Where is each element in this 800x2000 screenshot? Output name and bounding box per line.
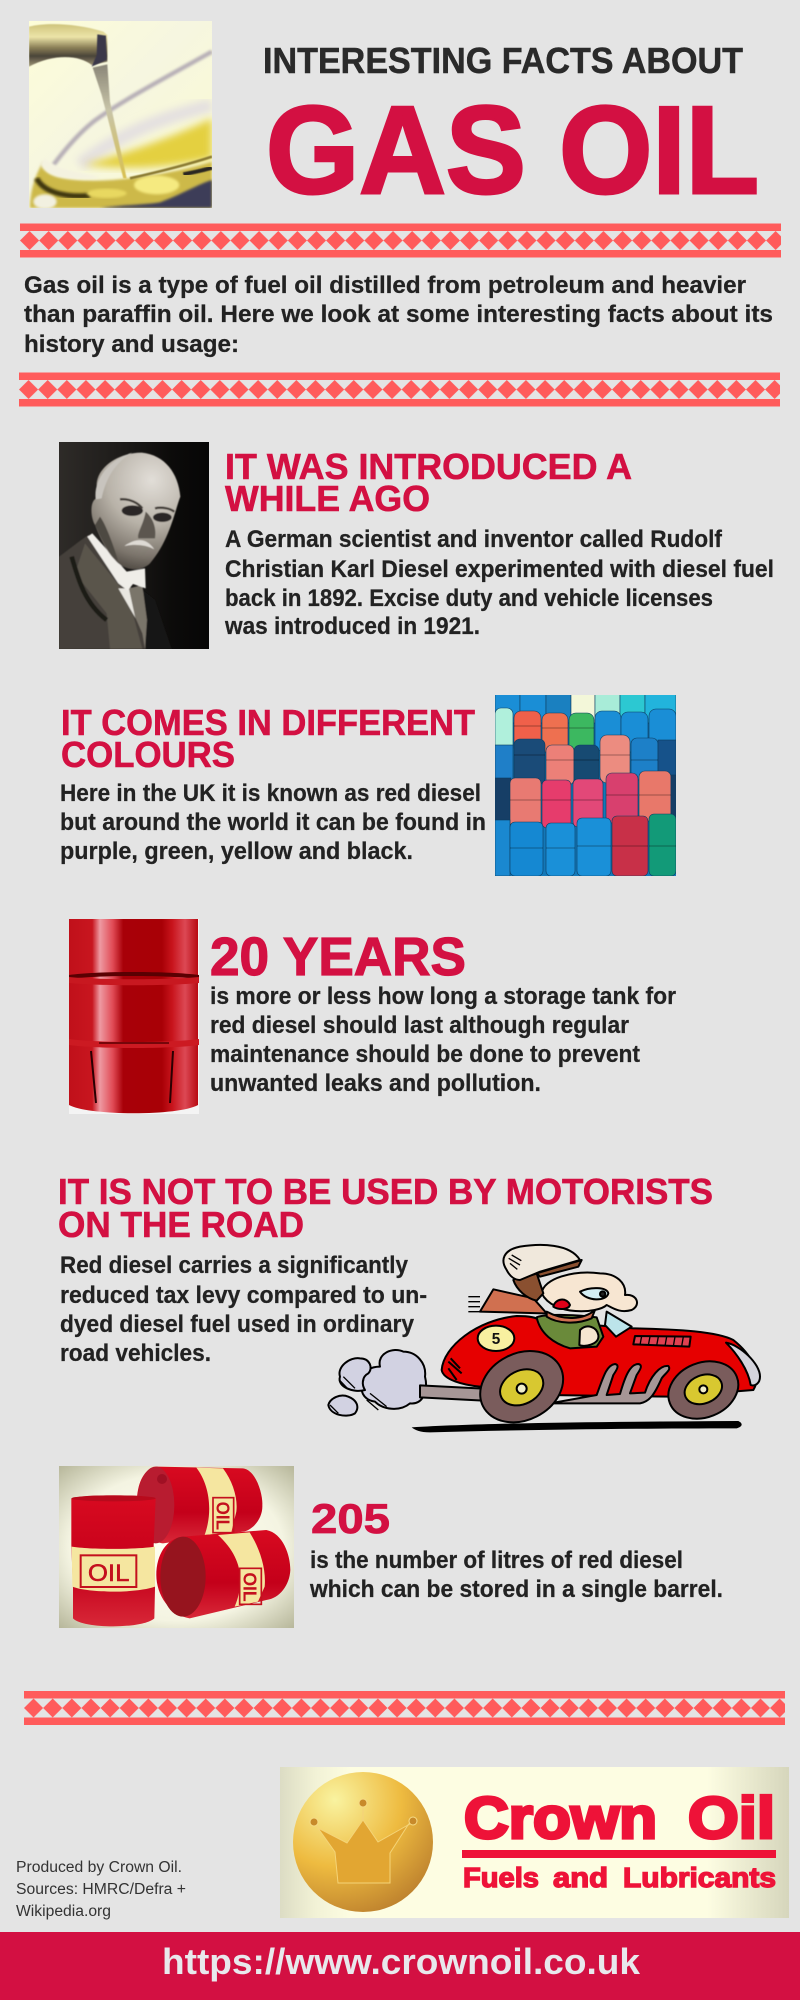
body text: tax levy: road vehicles. (60, 1340, 211, 1367)
heading: it was introduced: IT WAS INTRODUCED A (225, 446, 632, 487)
divider band 1 (20, 224, 781, 258)
photo: oil being poured (29, 21, 212, 208)
illustration: cartoon racing car: 5 (492, 1331, 501, 1348)
brand tagline: Fuels (463, 1862, 539, 1893)
footer bar with URL: https://www.crownoil.co.uk (162, 1941, 641, 1982)
credits text: Wikipedia.org (16, 1903, 111, 1920)
heading: not to be used by motorists (58, 1171, 713, 1245)
body text: Rudolf Diesel: back in 1892. Excise duty and vehicle licenses (225, 585, 713, 612)
body text: litres per barrel (309, 1547, 723, 1603)
heading: 20 years: 20 YEARS (210, 927, 466, 987)
intro text (24, 272, 773, 358)
brand name: Oil (688, 1786, 775, 1851)
brand name: Crown (464, 1786, 657, 1851)
body text: tax levy: Red diesel carries a significantly (60, 1252, 409, 1279)
left barrel (71, 1495, 156, 1626)
left barrel: OIL (88, 1560, 129, 1587)
title: interesting facts about: INTERESTING FACTS ABOUT (263, 40, 743, 81)
body text: Rudolf Diesel: Christian Karl Diesel experimented with diesel fuel (225, 556, 774, 583)
upper barrel (137, 1467, 262, 1543)
divider band 3 (24, 1691, 785, 1725)
body text: Rudolf Diesel: A German scientist and inventor called Rudolf (225, 526, 723, 553)
body text: tax levy: dyed diesel fuel used in ordinary (60, 1311, 415, 1338)
panel: different colours (60, 693, 676, 876)
heading: it was introduced: WHILE AGO (225, 478, 430, 519)
body text: red diesel colours: purple, green, yellow and black. (60, 838, 413, 865)
credits text (16, 1859, 186, 1920)
footer bar with URL (0, 1932, 800, 2000)
icon: gold crown coin (293, 1772, 433, 1912)
heading: it comes in different colours (61, 702, 475, 775)
lower barrel: OIL (240, 1572, 261, 1602)
body text: litres per barrel: is the number of litres of red diesel (310, 1547, 683, 1574)
lower barrel (156, 1530, 290, 1618)
body text: storage tank lifespan: red diesel should last although regular (210, 1012, 629, 1039)
body text: storage tank lifespan (210, 983, 676, 1097)
brand tagline: Lubricants (623, 1862, 776, 1893)
panel: not for motorists (58, 1171, 760, 1436)
divider band 2 (19, 372, 780, 406)
body text: red diesel colours: but around the world it can be found in (60, 809, 486, 836)
icon: red storage drum (69, 919, 199, 1114)
credits text: Produced by Crown Oil. (16, 1859, 182, 1876)
body text: tax levy (60, 1252, 427, 1367)
body text: Rudolf Diesel (224, 526, 774, 640)
brand name (464, 1786, 775, 1851)
brand rule (462, 1850, 776, 1858)
body text: Rudolf Diesel: was introduced in 1921. (224, 613, 480, 640)
body text: red diesel colours: Here in the UK it is known as red diesel (60, 780, 481, 807)
credits text: Sources: HMRC/Defra + (16, 1881, 186, 1898)
panel: 205 litres (59, 1466, 723, 1628)
heading: it comes in different colours: COLOURS (61, 734, 235, 775)
intro text: Gas oil is a type of fuel oil distilled from petroleum and heavier (24, 272, 746, 299)
intro text: history and usage: (24, 331, 239, 358)
intro text: than paraffin oil. Here we look at some interesting facts about its (24, 301, 773, 328)
body text: tax levy: reduced tax levy compared to un- (60, 1282, 427, 1309)
heading: it comes in different colours: IT COMES IN DIFFERENT (61, 702, 475, 743)
body text: storage tank lifespan: maintenance should be done to prevent (210, 1041, 640, 1068)
heading: not to be used by motorists: IT IS NOT TO BE USED BY MOTORISTS (58, 1171, 713, 1212)
heading: not to be used by motorists: ON THE ROAD (58, 1204, 304, 1245)
photo: coloured drums (495, 695, 676, 876)
photo: three oil barrels (59, 1466, 294, 1628)
upper barrel: OIL (212, 1502, 232, 1530)
logo: Crown Oil (280, 1767, 789, 1918)
body text: storage tank lifespan: unwanted leaks and pollution. (210, 1070, 541, 1097)
body text: litres per barrel: which can be stored in a single barrel. (309, 1576, 723, 1603)
illustration: cartoon racing car (327, 1244, 761, 1432)
photo: Rudolf Diesel portrait (59, 442, 209, 649)
panel: 20 years (69, 919, 676, 1114)
body text: storage tank lifespan: is more or less how long a storage tank for (210, 983, 676, 1010)
body text: red diesel colours (60, 780, 486, 865)
brand tagline: and (553, 1862, 608, 1893)
heading: it was introduced (225, 446, 632, 519)
title: gas oil: GAS OIL (266, 82, 759, 220)
panel: introduced a while ago (59, 442, 774, 649)
heading: 205: 205 (311, 1495, 390, 1542)
brand tagline (463, 1862, 776, 1893)
